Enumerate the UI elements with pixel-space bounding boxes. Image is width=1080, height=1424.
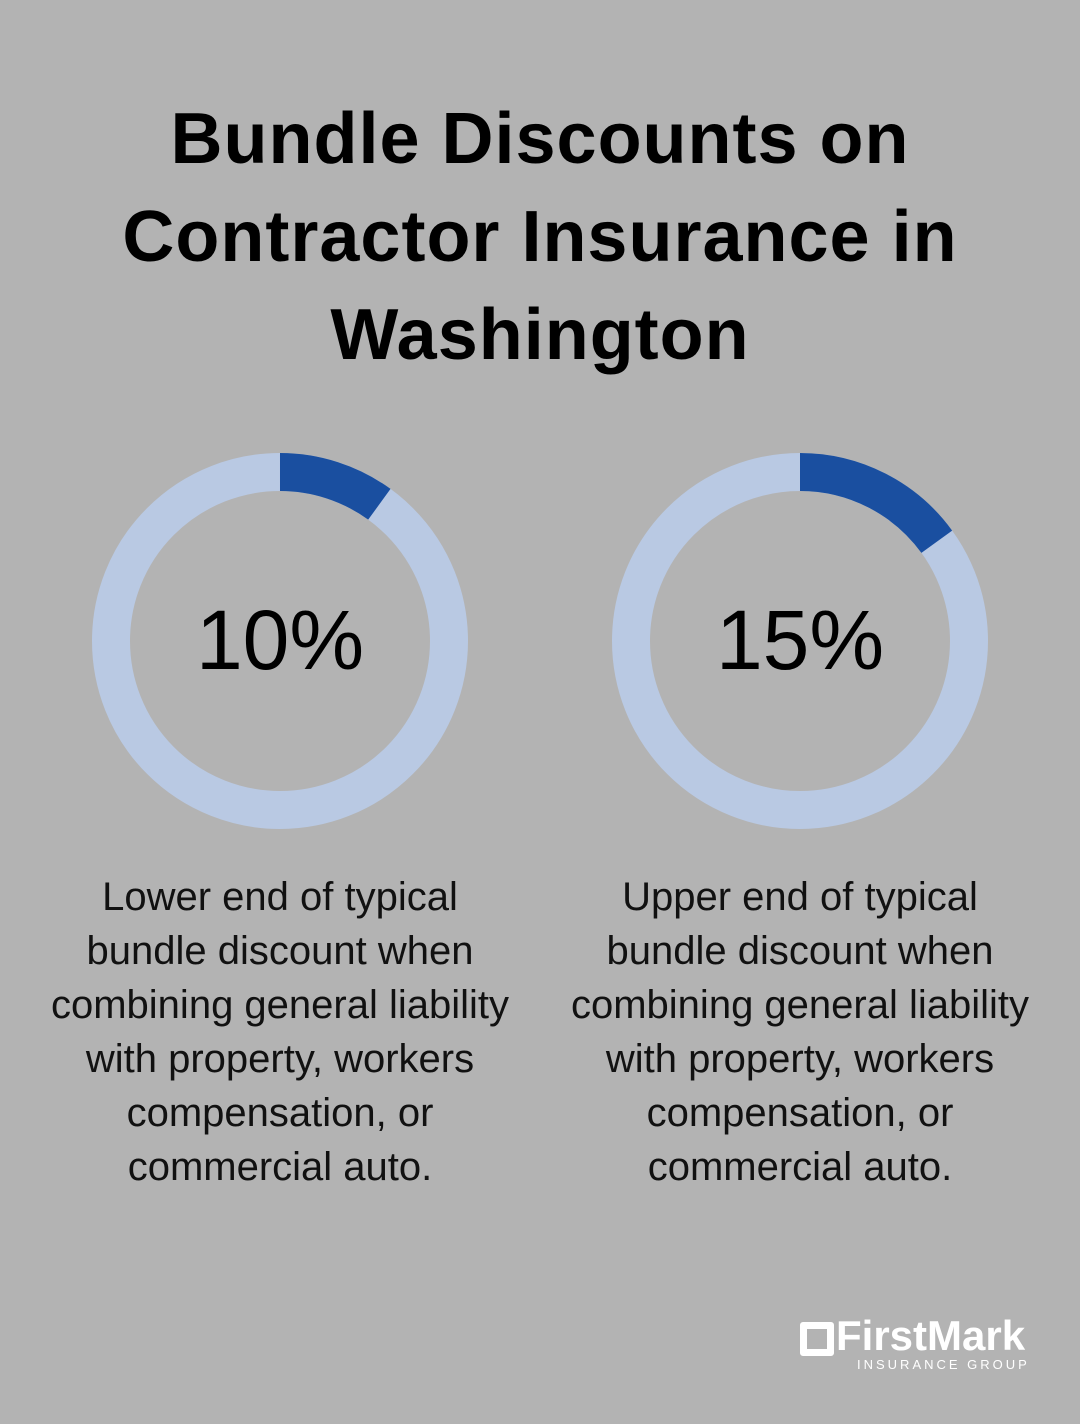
text: upper end description: commercial auto. — [648, 1145, 952, 1189]
donut: 15%: 15% — [716, 593, 884, 687]
text: upper end description: Upper end of typical — [622, 875, 978, 919]
text: lower end description: bundle discount when — [87, 929, 473, 973]
text: upper end description: bundle discount when — [607, 929, 993, 973]
title — [122, 99, 958, 375]
title: Washington — [330, 295, 750, 375]
icon: logo square — [800, 1322, 834, 1356]
logo: FirstMark — [800, 1312, 1030, 1372]
donut: 10%: 10% — [196, 593, 364, 687]
text: upper end description: compensation, or — [647, 1091, 953, 1135]
title: Contractor Insurance in — [122, 197, 958, 277]
title: Bundle Discounts on — [170, 99, 910, 179]
text: upper end description: combining general liability — [571, 983, 1029, 1027]
logo: FirstMark: INSURANCE GROUP — [857, 1357, 1030, 1372]
text: lower end description: compensation, or — [127, 1091, 433, 1135]
text: lower end description: Lower end of typical — [102, 875, 458, 919]
donut: 10% — [92, 453, 468, 829]
text: lower end description: commercial auto. — [128, 1145, 432, 1189]
text: upper end description: with property, workers — [606, 1037, 994, 1081]
donut: 15% — [612, 453, 988, 829]
text: lower end description: combining general liability — [51, 983, 509, 1027]
logo: FirstMark: FirstMark — [836, 1312, 1025, 1359]
text: lower end description: with property, workers — [86, 1037, 474, 1081]
text: lower end description — [51, 875, 509, 1189]
text: upper end description — [571, 875, 1029, 1189]
